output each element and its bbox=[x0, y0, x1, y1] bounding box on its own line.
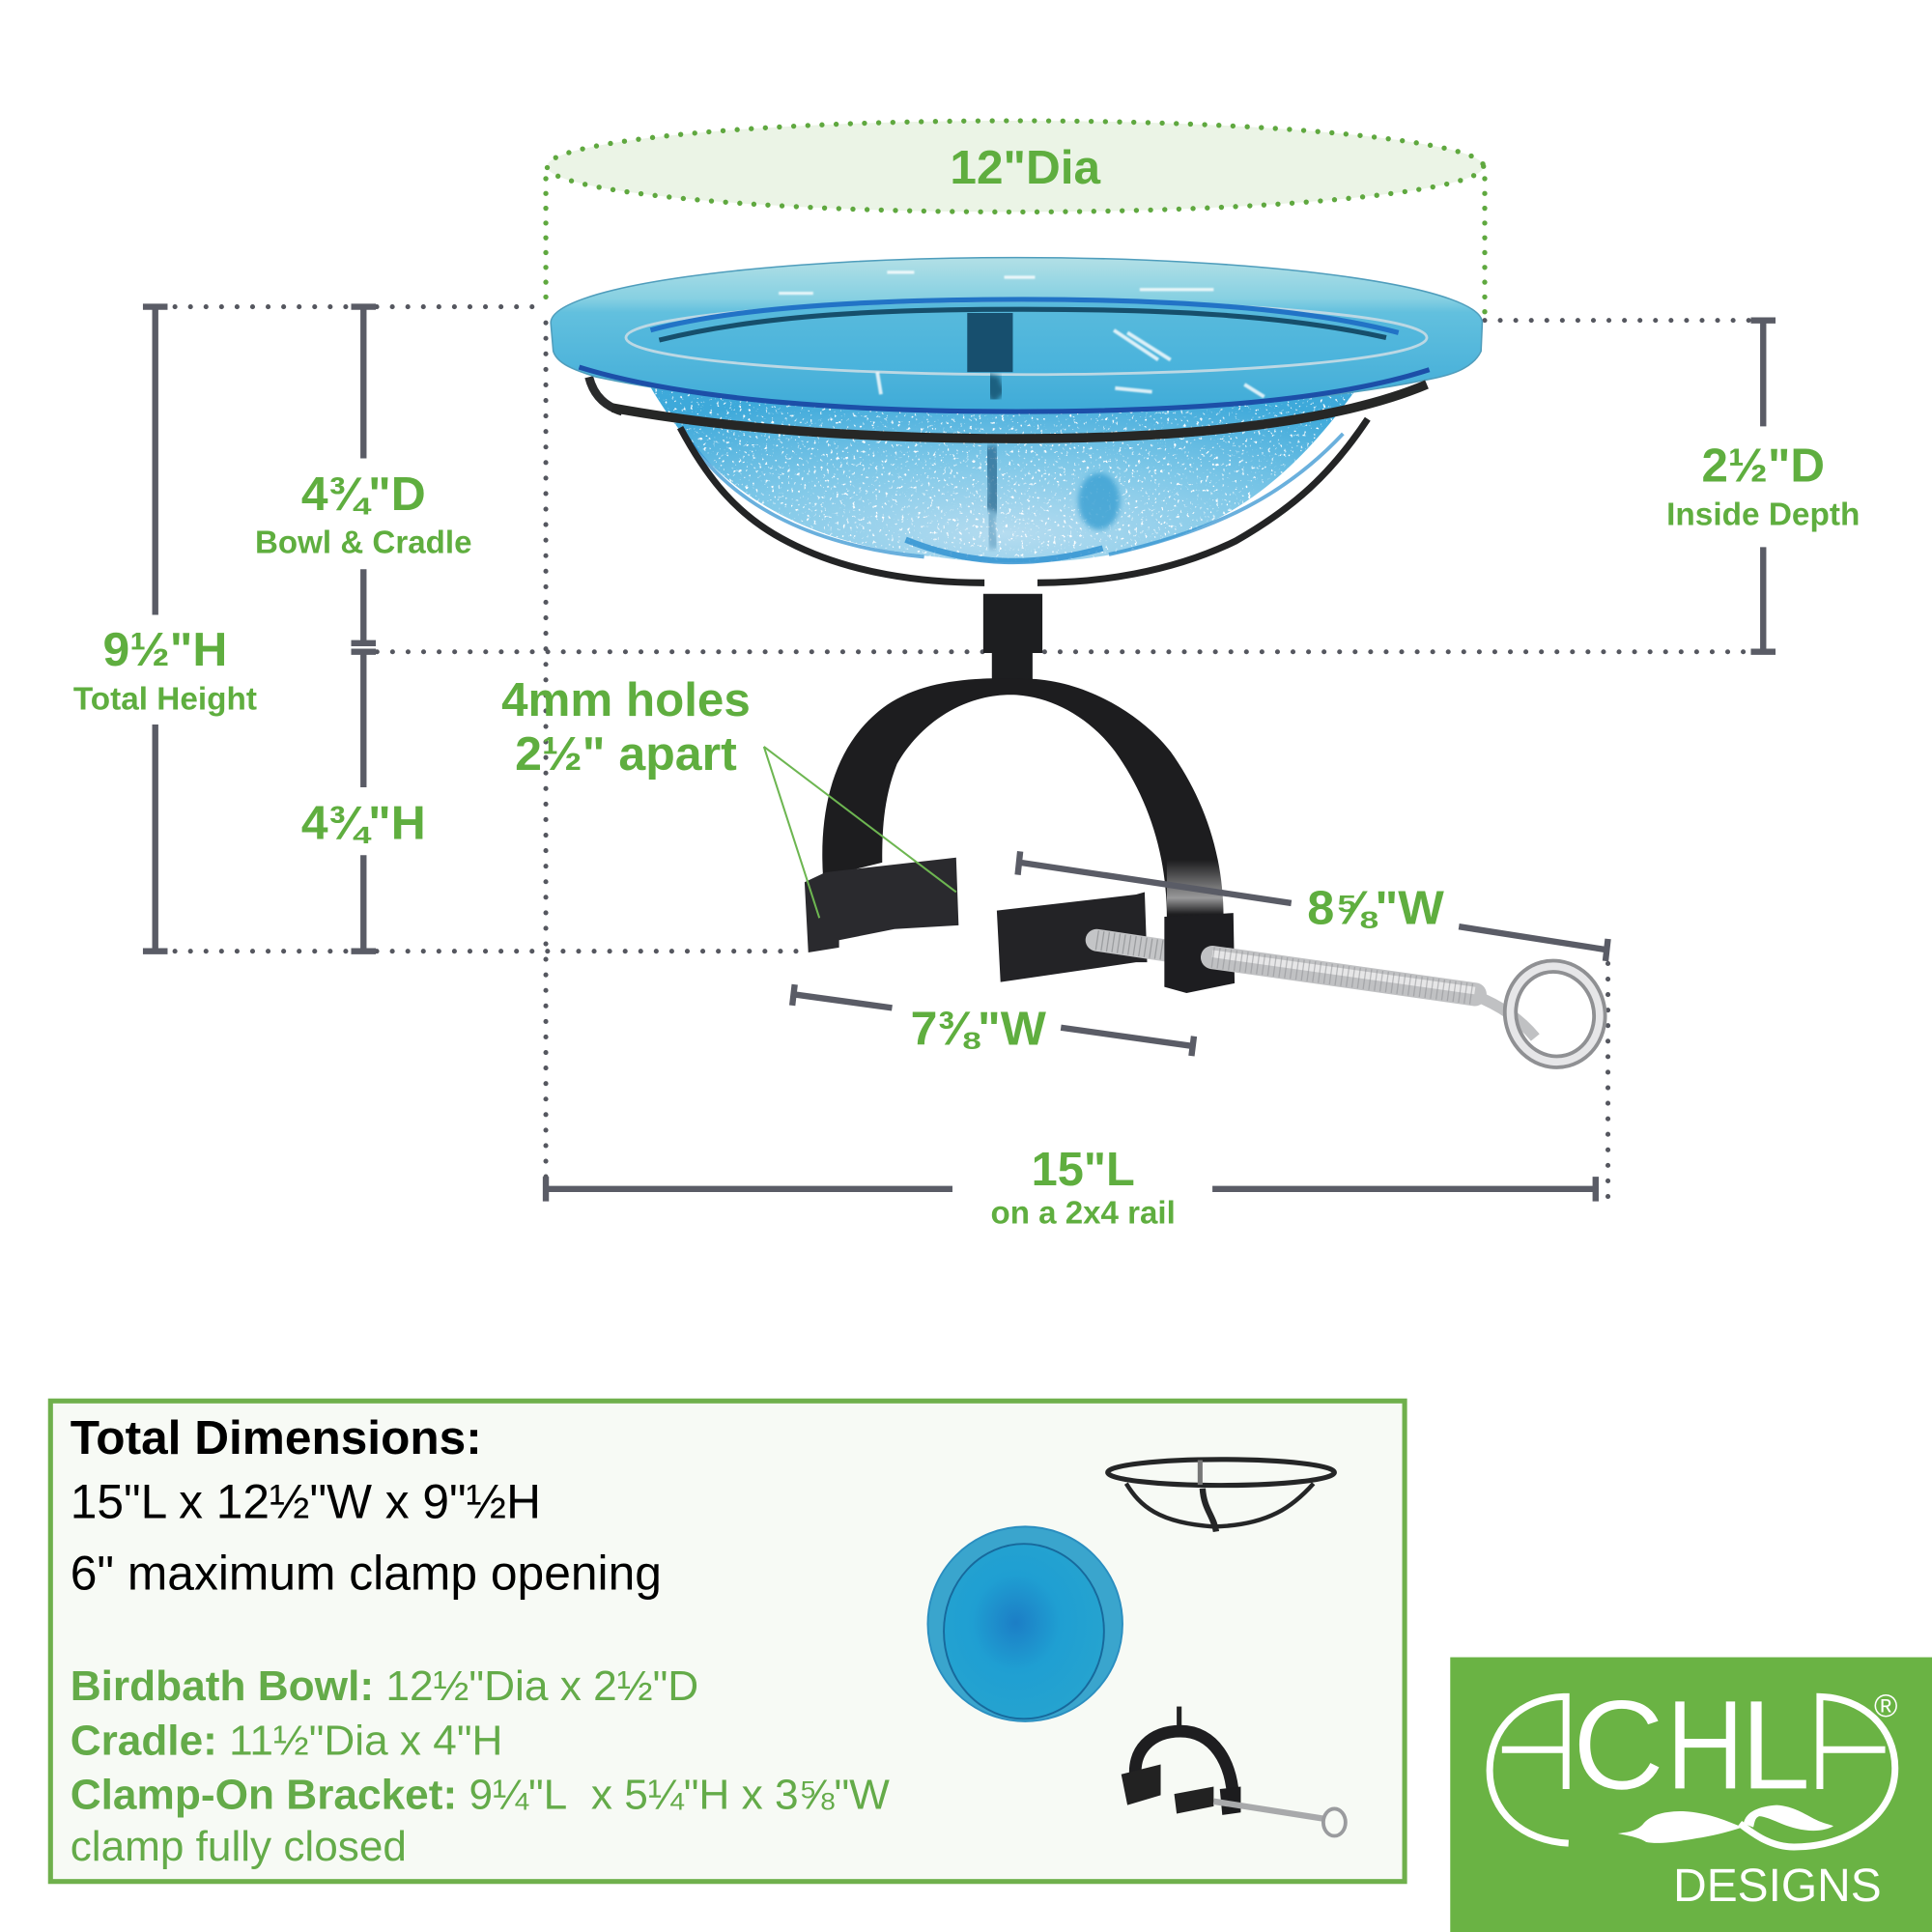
bowl body bbox=[640, 370, 1370, 562]
logo letters: L bbox=[1740, 1674, 1811, 1817]
threaded rod rear bbox=[1096, 940, 1171, 952]
arch highlight bbox=[1167, 860, 1224, 914]
panel: total dimensions bbox=[50, 1401, 1405, 1882]
arch bbox=[822, 678, 1224, 918]
clamp block bbox=[1164, 913, 1235, 993]
label: inside depth: 2½"D bbox=[1701, 440, 1825, 493]
label: 4 and three quarter depth: 4¾"D bbox=[301, 469, 426, 521]
callout pointer lines bbox=[764, 747, 956, 918]
dimension: 7 3/8 width bbox=[792, 984, 1194, 1056]
cradle arms bbox=[680, 419, 1368, 582]
icon: mini clamp bbox=[1122, 1707, 1346, 1836]
diameter ellipse bbox=[547, 121, 1484, 212]
label: mounting holes: 2½" apart bbox=[515, 727, 737, 781]
logo letters: H bbox=[1665, 1675, 1745, 1817]
panel heading: Total Dimensions: bbox=[71, 1412, 482, 1464]
label: 9 and a half inch height: 9½"H bbox=[103, 624, 227, 676]
label: 9 and a half inch height bbox=[73, 624, 257, 718]
dimension: total height bbox=[73, 307, 257, 952]
birdbath bowl with cradle bbox=[551, 258, 1482, 680]
eye hook ring bbox=[1499, 956, 1610, 1072]
label: 12 inch diameter: 12"Dia bbox=[950, 142, 1101, 194]
label: 4 and three quarter depth bbox=[255, 469, 472, 561]
label: 15 inch length: 15"L bbox=[1032, 1144, 1135, 1196]
label: mounting holes bbox=[501, 673, 751, 781]
label: inside depth bbox=[1666, 440, 1860, 532]
total dimensions line: 15"L x 12½"W x 9"½H bbox=[71, 1474, 541, 1528]
bracket spec: Clamp-On Bracket: 9¼"L x 5¼"H x 3⅝"W bbox=[71, 1771, 890, 1818]
dimension: 8 5/8 width bbox=[1018, 851, 1608, 961]
label: 15 inch length bbox=[991, 1144, 1176, 1232]
label: mounting holes: 4mm holes bbox=[501, 673, 751, 726]
left jaw bbox=[805, 858, 958, 952]
sliding plate bbox=[997, 892, 1148, 982]
rim lower blue band bbox=[579, 367, 1430, 412]
label: inside depth: Inside Depth bbox=[1666, 497, 1860, 532]
label: 8 5/8 inch: 8⅝"W bbox=[1307, 883, 1445, 935]
logo wings bbox=[1618, 1805, 1833, 1843]
rim highlights bbox=[779, 272, 1264, 397]
label: 4 and three quarter depth: Bowl & Cradle bbox=[255, 526, 472, 561]
logo: Achla Designs bbox=[1450, 1658, 1932, 1932]
bracket note: clamp fully closed bbox=[71, 1823, 407, 1870]
cradle back ring end bbox=[589, 377, 622, 412]
cradle stem bbox=[983, 594, 1042, 680]
label: 15 inch length: on a 2x4 rail bbox=[991, 1196, 1176, 1232]
cradle metal ring bbox=[612, 384, 1427, 439]
logo swash right A bbox=[1740, 1696, 1895, 1847]
icon: mini bowl bbox=[927, 1526, 1122, 1721]
label: 7 3/8 inch: 7⅜"W bbox=[911, 1004, 1047, 1056]
label: bracket height: 4¾"H bbox=[301, 798, 426, 850]
cradle spec: Cradle: 11½"Dia x 4"H bbox=[71, 1717, 502, 1764]
logo subtitle: DESIGNS bbox=[1673, 1861, 1882, 1912]
icon: mini cradle bbox=[1108, 1460, 1334, 1531]
clamp opening line: 6" maximum clamp opening bbox=[71, 1546, 662, 1600]
dimension: bracket height bbox=[301, 652, 426, 952]
grey dotted guide lines bbox=[175, 307, 1749, 1198]
logo letters: C bbox=[1573, 1674, 1664, 1817]
threaded rod front bbox=[1212, 953, 1535, 1037]
logo swash left A bbox=[1490, 1696, 1569, 1843]
green dotted drop lines bbox=[546, 179, 1485, 323]
dimension: overall length bbox=[546, 1144, 1596, 1232]
logo registered mark: ® bbox=[1874, 1689, 1897, 1724]
bowl rim bbox=[551, 258, 1482, 411]
label: 9 and a half inch height: Total Height bbox=[73, 682, 257, 718]
bowl spec: Birdbath Bowl: 12½"Dia x 2½"D bbox=[71, 1662, 698, 1710]
bowl well bbox=[626, 299, 1427, 397]
logo letters bbox=[1573, 1674, 1811, 1817]
dimension: bowl and cradle depth bbox=[255, 307, 472, 643]
clamp bracket photo bbox=[764, 678, 1610, 1072]
dimension: inside depth bbox=[1666, 321, 1860, 652]
